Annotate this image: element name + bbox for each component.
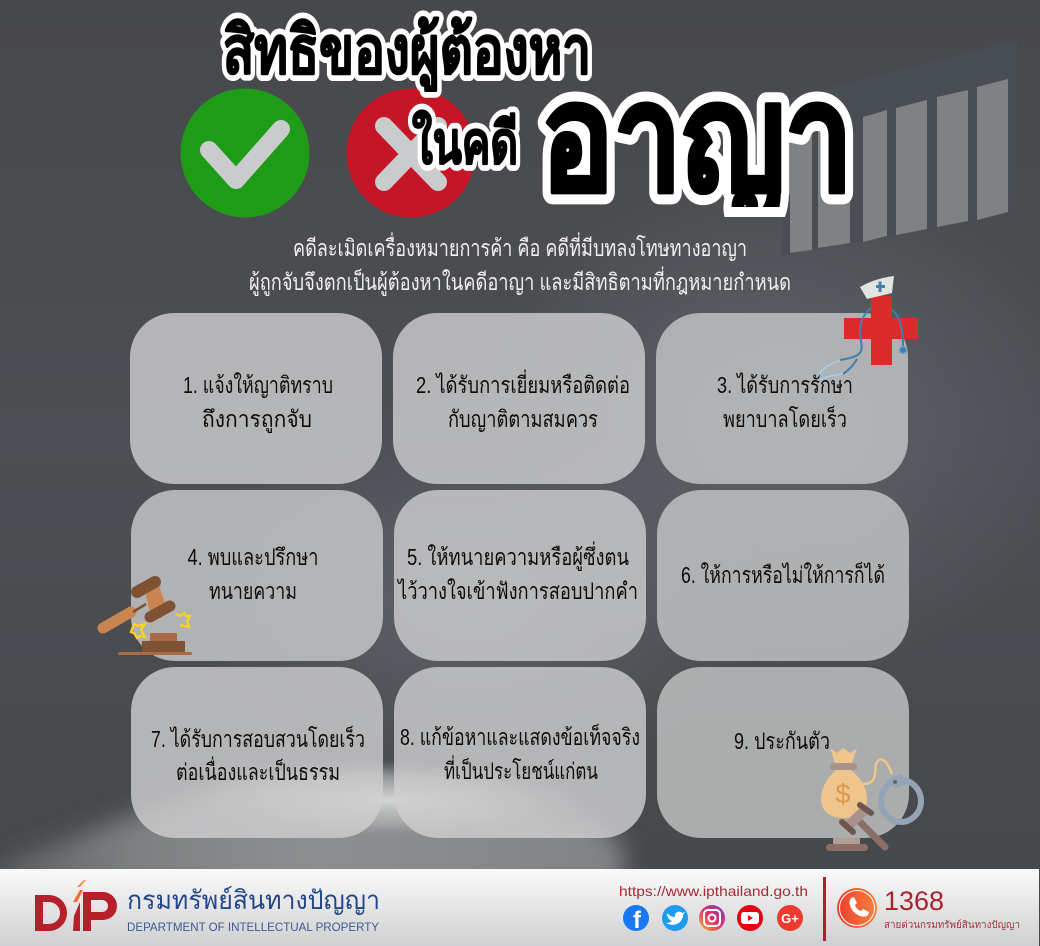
title bbox=[223, 13, 853, 227]
panel: right 5 bbox=[394, 490, 646, 661]
icon: phone bbox=[837, 888, 877, 928]
title: สิทธิของผู้ต้องหา bbox=[223, 13, 591, 92]
icon: google plus: G+ bbox=[781, 911, 799, 926]
panel: right 6: 6. ให้การหรือไม่ให้การก็ได้ bbox=[681, 560, 885, 588]
icon: medical cross with nurse cap bbox=[817, 276, 918, 380]
title: อาญา bbox=[541, 54, 853, 227]
title: สิทธิของผู้ต้องหา bbox=[223, 13, 591, 92]
panel: right 4: ทนายความ bbox=[209, 578, 297, 604]
cross icon bbox=[346, 88, 476, 218]
panel: right 2: กับญาติตามสมควร bbox=[448, 406, 598, 432]
icon: gavel bbox=[103, 582, 192, 655]
panel: right 5: 5. ให้ทนายความหรือผู้ซึ่งตน bbox=[407, 541, 629, 571]
panel: right 8: ที่เป็นประโยชน์แก่ตน bbox=[444, 755, 598, 784]
subtitle bbox=[249, 232, 791, 296]
subtitle: คดีละเมิดเครื่องหมายการค้า คือ คดีที่มีบทลงโทษทางอาญา bbox=[293, 232, 747, 261]
title: อาญา bbox=[541, 54, 853, 227]
title: ในคดี bbox=[412, 109, 518, 176]
icon: instagram bbox=[699, 905, 725, 931]
prison window with bars bbox=[782, 40, 1017, 256]
icon: money bag, gavel and handcuffs bbox=[821, 748, 921, 851]
panel: right 4 bbox=[131, 490, 383, 661]
icon: facebook bbox=[623, 905, 649, 934]
footer bar bbox=[0, 869, 1039, 946]
logo text: กรมทรัพย์สินทางปัญญา bbox=[127, 885, 380, 915]
icon: google plus bbox=[777, 905, 803, 931]
icon: money bag, gavel and handcuffs: $ bbox=[835, 779, 851, 809]
panel: right 9: 9. ประกันตัว bbox=[734, 728, 830, 754]
panel: right 8: 8. แก้ข้อหาและแสดงข้อเท็จจริง bbox=[400, 722, 640, 750]
panel: right 7 bbox=[131, 667, 383, 838]
panel: right 5: ไว้วางใจเข้าฟังการสอบปากคำ bbox=[396, 578, 638, 604]
panel: right 3: 3. ได้รับการรักษา bbox=[717, 372, 853, 398]
hotline caption: สายด่วนกรมทรัพย์สินทางปัญญา bbox=[884, 919, 1020, 931]
logo: DIP bbox=[35, 880, 117, 931]
panel: right 6 bbox=[657, 490, 909, 661]
icon: facebook: f bbox=[633, 907, 642, 934]
panel: right 3 bbox=[656, 313, 908, 484]
panel: right 1: ถึงการถูกจับ bbox=[202, 406, 312, 433]
panel: right 7: 7. ได้รับการสอบสวนโดยเร็ว bbox=[151, 724, 365, 752]
panel: right 3: พยาบาลโดยเร็ว bbox=[723, 404, 847, 432]
panel: right 9 bbox=[657, 667, 909, 838]
panel: right 2: 2. ได้รับการเยี่ยมหรือติดต่อ bbox=[416, 369, 630, 398]
title: ในคดี bbox=[412, 109, 518, 176]
check mark icon bbox=[180, 88, 310, 218]
panel: right 7: ต่อเนื่องและเป็นธรรม bbox=[176, 756, 340, 785]
panel: right 4: 4. พบและปรึกษา bbox=[188, 544, 318, 570]
logo text: DEPARTMENT OF INTELLECTUAL PROPERTY bbox=[127, 920, 379, 934]
divider bbox=[823, 877, 826, 941]
hotline number: 1368 bbox=[884, 886, 944, 916]
panel: right 1: 1. แจ้งให้ญาติทราบ bbox=[183, 372, 333, 398]
panel: right 1 bbox=[130, 313, 382, 484]
panel: right 2 bbox=[393, 313, 645, 484]
panel: right 8 bbox=[394, 667, 646, 838]
website url: https://www.ipthailand.go.th bbox=[619, 883, 808, 899]
icon: twitter bbox=[662, 905, 688, 931]
logo text bbox=[127, 885, 380, 934]
icon: youtube bbox=[737, 905, 763, 931]
subtitle: ผู้ถูกจับจึงตกเป็นผู้ต้องหาในคดีอาญา และมีสิทธิตามที่กฎหมายกำหนด bbox=[249, 266, 791, 296]
